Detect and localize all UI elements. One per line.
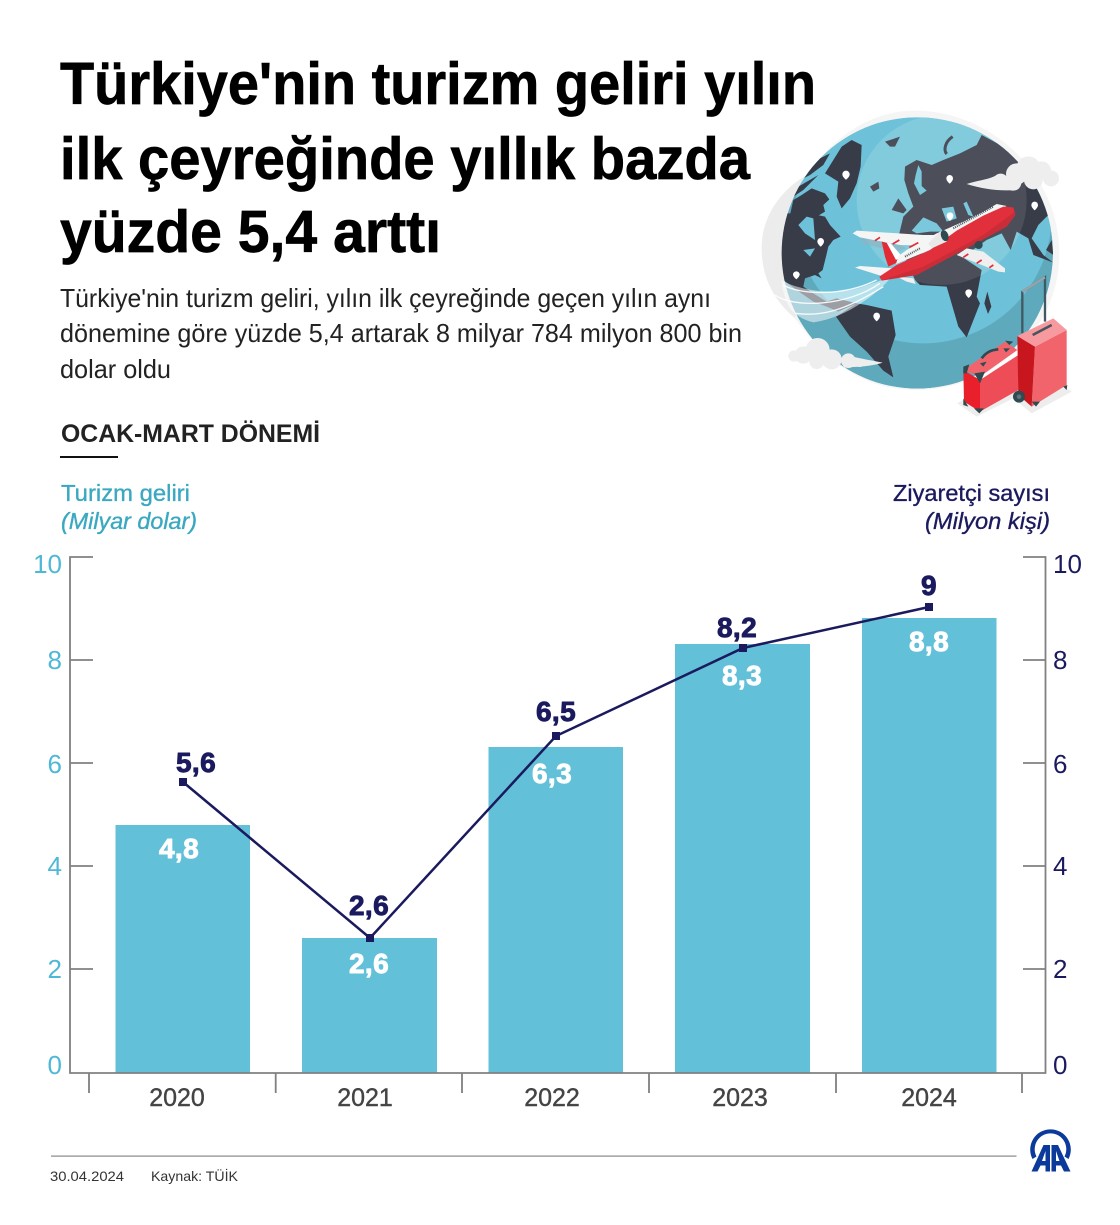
icon: globe halo xyxy=(762,111,1059,390)
Madagascar xyxy=(984,292,991,314)
Japan islands xyxy=(1046,240,1053,255)
icon: map pins xyxy=(793,171,1038,321)
title: ilk çeyreğinde yıllık bazda xyxy=(60,126,751,192)
line chart: ziyaretçi sayısı xyxy=(179,603,933,942)
line value labels xyxy=(176,570,937,921)
bar value labels: 2,6 xyxy=(349,948,389,979)
British Isles xyxy=(892,198,907,213)
left axis labels: 4 xyxy=(48,851,62,881)
bar chart: turizm geliri xyxy=(116,618,996,1073)
left axis title: Turizm geliri xyxy=(61,480,190,506)
inland seas xyxy=(798,165,973,257)
left axis labels: 8 xyxy=(48,645,62,675)
icon: clouds xyxy=(788,156,1059,369)
icon: speed crescent behind globe xyxy=(762,175,807,318)
line value labels: 2,6 xyxy=(349,890,389,921)
title xyxy=(60,51,816,265)
continents xyxy=(763,135,1053,377)
Africa xyxy=(903,253,982,337)
icon: suitcases xyxy=(957,277,1072,417)
bar value labels: 8,8 xyxy=(909,626,949,657)
year labels: 2022 xyxy=(524,1084,580,1112)
footer rule xyxy=(51,1156,1016,1157)
year labels: 2023 xyxy=(712,1084,768,1112)
year labels: 2024 xyxy=(901,1084,957,1112)
subtitle text block xyxy=(60,283,742,384)
left axis labels xyxy=(33,549,62,1080)
Svalbard xyxy=(885,137,900,147)
right axis labels: 4 xyxy=(1053,851,1067,881)
right axis title xyxy=(893,480,1050,534)
title: yüzde 5,4 arttı xyxy=(60,199,441,265)
Greenland xyxy=(825,140,862,208)
icon: speed swoosh xyxy=(775,277,892,322)
Iceland xyxy=(870,182,879,192)
Novaya Zemlya xyxy=(945,137,953,154)
right axis title: Ziyaretçi sayısı xyxy=(893,480,1050,506)
bar value labels: 4,8 xyxy=(159,833,199,864)
right axis labels: 2 xyxy=(1053,954,1067,984)
year labels xyxy=(149,1084,957,1112)
illustration: globe, plane and suitcases xyxy=(762,87,1072,417)
bar value labels: 6,3 xyxy=(532,758,572,789)
right axis labels: 0 xyxy=(1053,1050,1067,1080)
line value labels: 8,2 xyxy=(717,612,757,643)
right axis labels: 8 xyxy=(1053,645,1067,675)
footer date and source: Kaynak: TÜİK xyxy=(151,1167,239,1184)
subtitle text block: Türkiye'nin turizm geliri, yılın ilk çeyreğinde geçen yılın aynı xyxy=(60,283,711,313)
year labels: 2021 xyxy=(337,1084,393,1112)
bar value labels: 8,3 xyxy=(722,660,762,691)
line value labels: 5,6 xyxy=(176,747,216,778)
left axis labels: 6 xyxy=(48,749,62,779)
title: Türkiye'nin turizm geliri yılın xyxy=(60,51,816,117)
left axis labels: 2 xyxy=(48,954,62,984)
bar value labels xyxy=(159,626,949,979)
icon: globe xyxy=(782,117,1053,389)
right axis labels: 10 xyxy=(1053,549,1082,579)
South America xyxy=(836,303,896,377)
footer date and source: 30.04.2024 xyxy=(50,1168,124,1184)
Eurasia xyxy=(899,135,1053,263)
year labels: 2020 xyxy=(149,1084,205,1112)
arctic islands xyxy=(803,153,830,178)
line value labels: 9 xyxy=(921,570,937,601)
icon: AA logo xyxy=(1030,1129,1071,1172)
subtitle text block: dolar oldu xyxy=(60,354,171,384)
icon: airplane xyxy=(853,204,1015,284)
left axis title: (Milyar dolar) xyxy=(61,508,197,534)
North and Central America xyxy=(782,213,856,312)
footer date and source xyxy=(50,1167,239,1184)
section heading: OCAK-MART DÖNEMİ xyxy=(61,419,320,448)
left axis labels: 0 xyxy=(48,1050,62,1080)
right axis labels: 6 xyxy=(1053,749,1067,779)
left axis title xyxy=(61,480,197,534)
right axis title: (Milyon kişi) xyxy=(925,508,1050,534)
light overlay on upper continents xyxy=(857,115,1027,285)
chart axes xyxy=(70,557,1046,1093)
right axis labels xyxy=(1053,549,1082,1080)
line value labels: 6,5 xyxy=(536,696,576,727)
subtitle text block: dönemine göre yüzde 5,4 artarak 8 milyar 784 milyon 800 bin xyxy=(60,318,742,348)
left axis labels: 10 xyxy=(33,549,62,579)
